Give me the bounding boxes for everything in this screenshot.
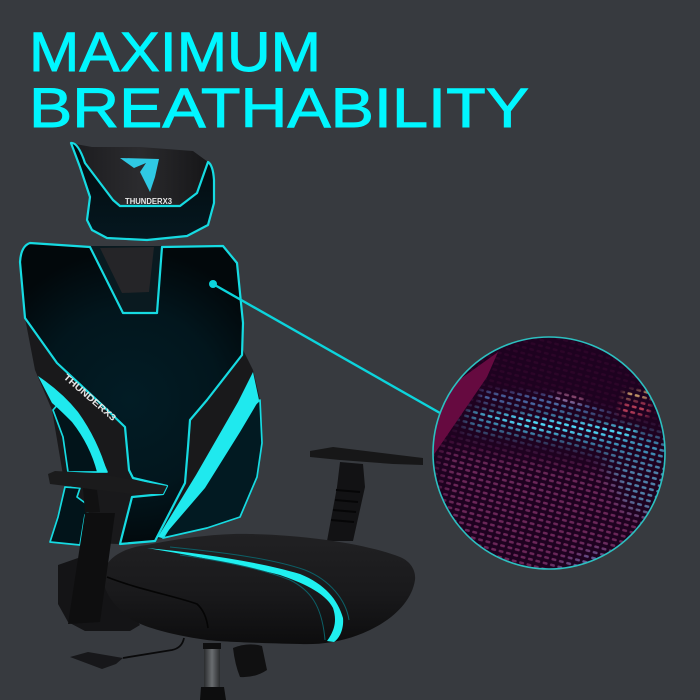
back mesh upper panel: [20, 243, 243, 544]
mesh wedge: [434, 352, 498, 454]
height knob: [233, 644, 267, 677]
seat front seam: [107, 577, 208, 628]
title: [29, 20, 529, 139]
right armrest: [310, 447, 423, 541]
headrest: [70, 143, 214, 240]
seat cushion: [103, 534, 415, 644]
headrest logotype: THUNDERX3: [125, 197, 173, 206]
connector dot: [209, 280, 217, 288]
tilt lever: [70, 638, 184, 669]
chair back black frame: [25, 300, 262, 544]
chair base column: [200, 643, 226, 700]
left cyan stripe: [38, 376, 107, 472]
coloured mesh dashes: [434, 338, 664, 568]
headrest support: [90, 246, 162, 313]
left side mesh: [50, 402, 107, 545]
headrest neck: [100, 247, 154, 293]
connector line: [209, 280, 440, 413]
magnified mesh lens: [432, 336, 666, 570]
chair: [20, 143, 423, 700]
headrest logo: [120, 158, 159, 192]
seat underside: [58, 558, 140, 631]
title: MAXIMUM: [29, 20, 321, 83]
left armrest: [48, 471, 167, 624]
back logotype: THUNDERX3: [62, 372, 118, 423]
right side mesh: [163, 400, 262, 538]
right cyan stripe: [158, 372, 259, 538]
seat stripe: [147, 547, 349, 642]
title: BREATHABILITY: [29, 76, 529, 139]
